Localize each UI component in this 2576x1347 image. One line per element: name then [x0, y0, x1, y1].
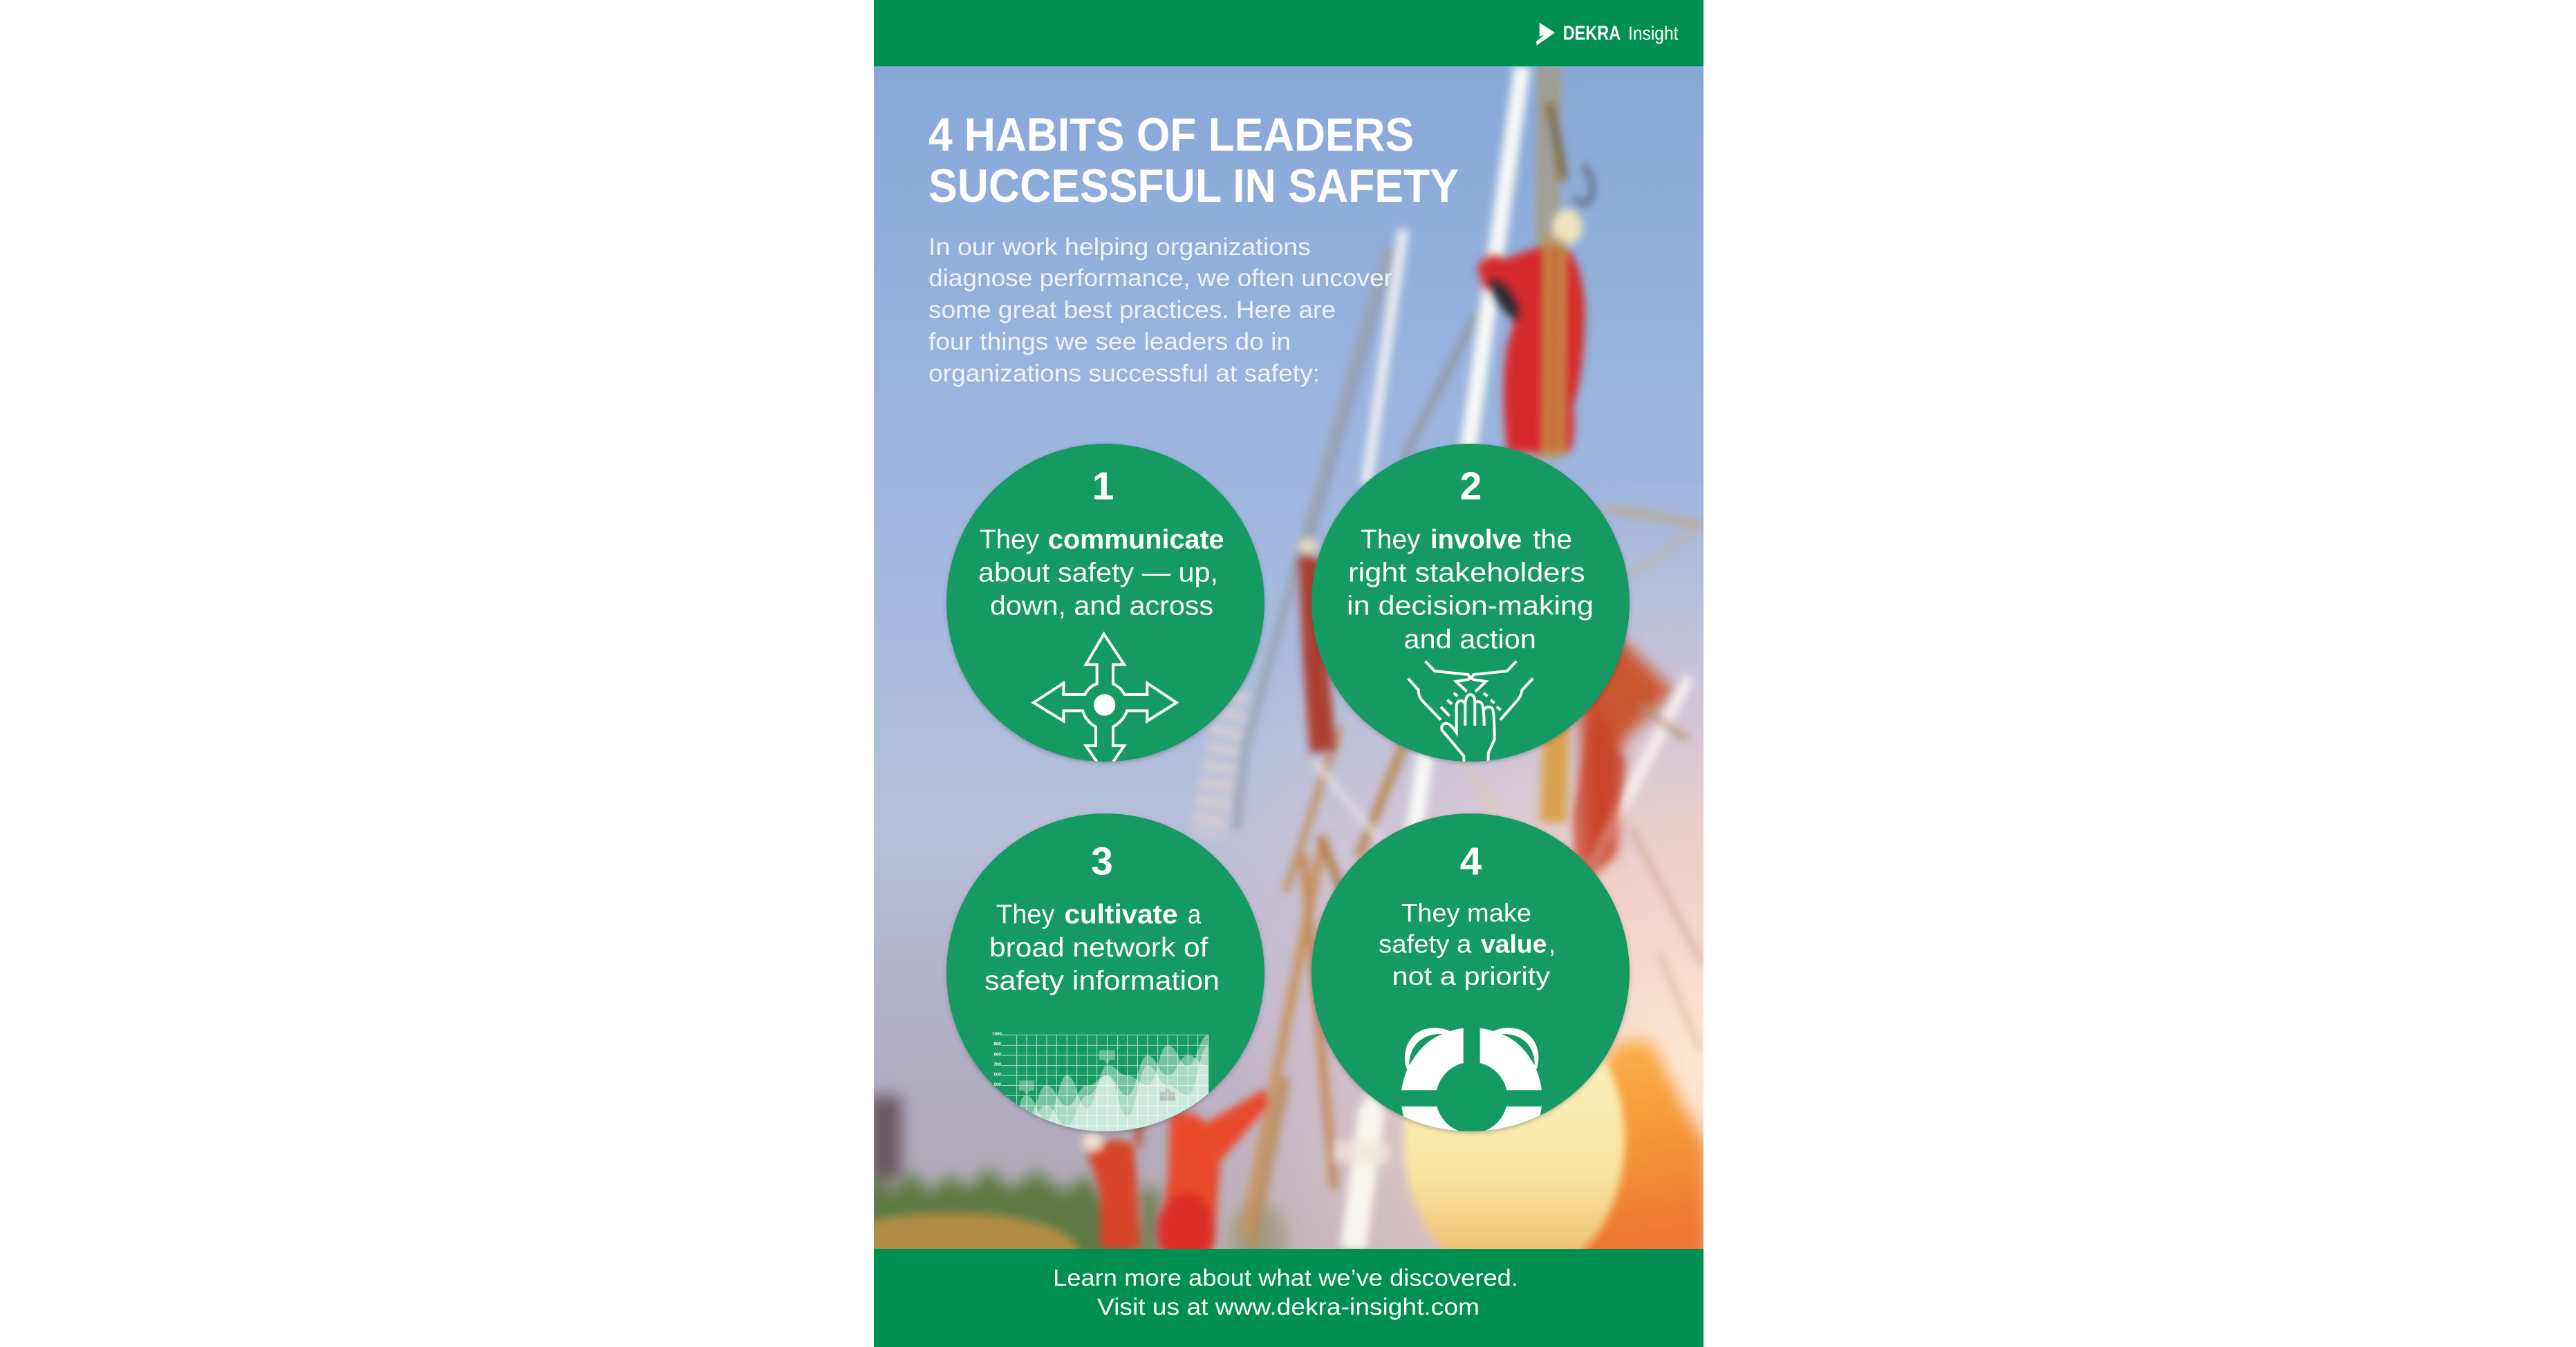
icon: four-way arrows [1034, 634, 1177, 764]
habit 1 text: They [980, 525, 1039, 554]
number 4: 4 [1460, 840, 1482, 884]
habit 2 text: right stakeholders [1348, 558, 1585, 588]
icon: life ring [1401, 1028, 1542, 1131]
habit 1 text: communicate [1048, 525, 1224, 554]
title: 4 HABITS OF LEADERS [928, 109, 1414, 161]
chart axis labels [992, 1032, 1002, 1087]
habit 3 text: cultivate [1065, 900, 1178, 930]
logo: DEKRA Insight [1536, 23, 1679, 46]
chart callouts [1019, 1050, 1115, 1095]
panel: habit 1 communicate [946, 444, 1264, 764]
icon: joined hands [1408, 661, 1533, 762]
habit 3 text: safety information [984, 966, 1220, 996]
chart axis labels: 800 [993, 1052, 1001, 1057]
habit 2 text: the [1533, 525, 1572, 554]
chart areas [1017, 1035, 1208, 1138]
chart axis labels: 600 [993, 1072, 1001, 1077]
intro paragraph: four things we see leaders do in [928, 328, 1291, 355]
blurred construction photo background [823, 66, 1708, 1289]
number 1: 1 [1092, 464, 1114, 509]
title: SUCCESSFUL IN SAFETY [928, 160, 1459, 212]
logo sub-brand: Insight [1628, 23, 1679, 44]
habit 4 text [1379, 898, 1556, 990]
header bar [874, 0, 1704, 66]
habit 2 text: and action [1403, 625, 1536, 654]
intro paragraph: In our work helping organizations [928, 234, 1311, 261]
habit 1 text: about safety — up, [978, 558, 1218, 588]
number 2: 2 [1460, 464, 1482, 509]
panel: habit 2 involve [1312, 444, 1630, 762]
habit 3 text [984, 900, 1220, 996]
chart grid [1001, 1035, 1208, 1138]
chart axis labels: 1000 [992, 1032, 1002, 1037]
habit 2 text: They [1361, 525, 1421, 554]
habit 1 text [978, 525, 1224, 621]
ground hay [874, 1208, 1083, 1249]
chart axis labels: 500 [993, 1082, 1001, 1087]
footer bar [874, 1249, 1704, 1347]
circle 4 [1312, 813, 1630, 1131]
habit 3 text: a [1188, 900, 1201, 930]
title [928, 109, 1459, 212]
icon: area chart [992, 1032, 1208, 1138]
habit 4 text: safety a [1379, 930, 1472, 959]
footer call to action: Learn more about what we’ve discovered. [1053, 1265, 1518, 1292]
panel: habit 3 cultivate [946, 813, 1264, 1138]
habit 3 text: broad network of [989, 933, 1208, 963]
chart callout low [1160, 1087, 1175, 1101]
circle 3 [946, 813, 1264, 1131]
circle 1 [946, 444, 1264, 762]
infographic canvas [874, 0, 1704, 1347]
circle 2 [1312, 444, 1630, 762]
intro paragraph: organizations successful at safety: [928, 360, 1320, 387]
chart axis labels: 700 [993, 1062, 1001, 1067]
number 3: 3 [1091, 840, 1113, 884]
chart axis labels: 900 [993, 1042, 1001, 1047]
logo wordmark: DEKRA [1563, 23, 1621, 45]
habit 2 text: in decision-making [1347, 591, 1594, 621]
habit 1 text: down, and across [990, 591, 1213, 621]
footer call to action: Visit us at www.dekra-insight.com [1097, 1294, 1480, 1320]
intro paragraph: diagnose performance, we often uncover [928, 265, 1392, 292]
habit 2 text [1347, 525, 1594, 654]
intro paragraph: some great best practices. Here are [928, 296, 1336, 323]
habit 3 text: They [996, 900, 1055, 930]
habit 4 text: not a priority [1392, 962, 1551, 990]
habit 2 text: involve [1430, 525, 1522, 554]
habit 4 text: , [1549, 930, 1556, 959]
logo mark [1536, 23, 1555, 46]
intro paragraph [928, 234, 1392, 387]
panel: habit 4 value [1312, 813, 1630, 1169]
habit 4 text: value [1481, 930, 1547, 959]
habit 4 text: They make [1401, 898, 1531, 927]
footer call to action [1053, 1265, 1518, 1320]
